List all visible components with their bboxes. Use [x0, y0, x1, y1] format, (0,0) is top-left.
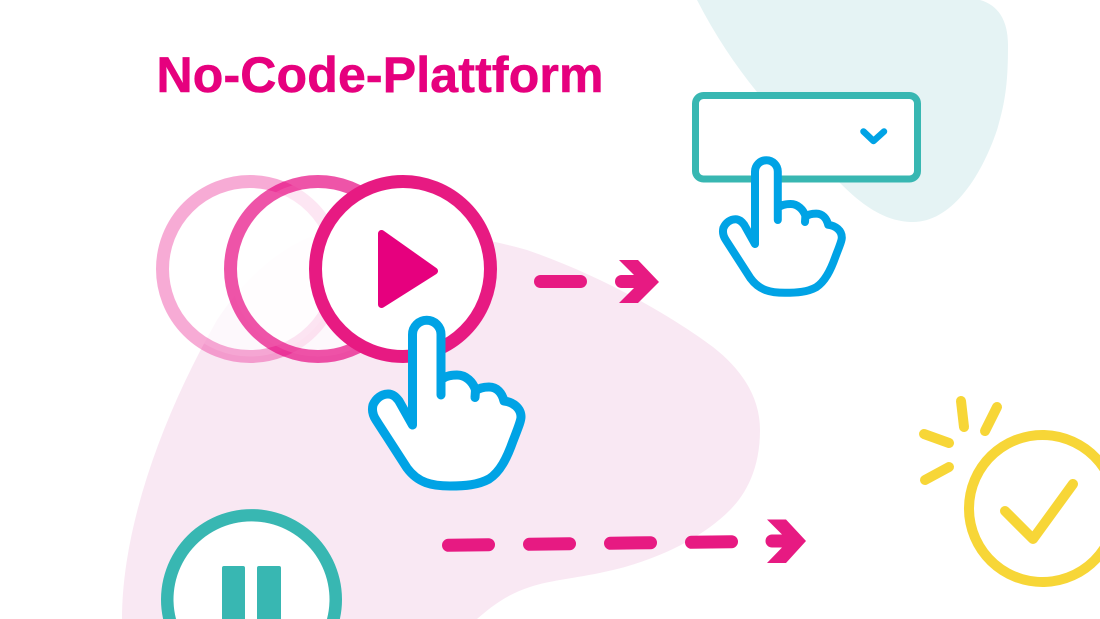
dropdown field	[696, 96, 918, 179]
icon: dropdown chevron	[864, 132, 884, 141]
icon: pause button	[161, 509, 342, 619]
background blob: pink	[122, 230, 760, 619]
arrow: pause to check	[448, 520, 806, 563]
background blob: teal	[697, 0, 1008, 222]
icon: check mark circle with rays	[924, 401, 1100, 587]
icon: hand pointer on play button	[372, 320, 521, 486]
icon: hand pointer on dropdown	[723, 160, 842, 293]
title: No-Code-Plattform	[156, 47, 604, 103]
icon: fading circle trail behind play button	[162, 182, 406, 356]
arrow: play to dropdown	[534, 260, 659, 303]
icon: play button	[316, 182, 490, 356]
